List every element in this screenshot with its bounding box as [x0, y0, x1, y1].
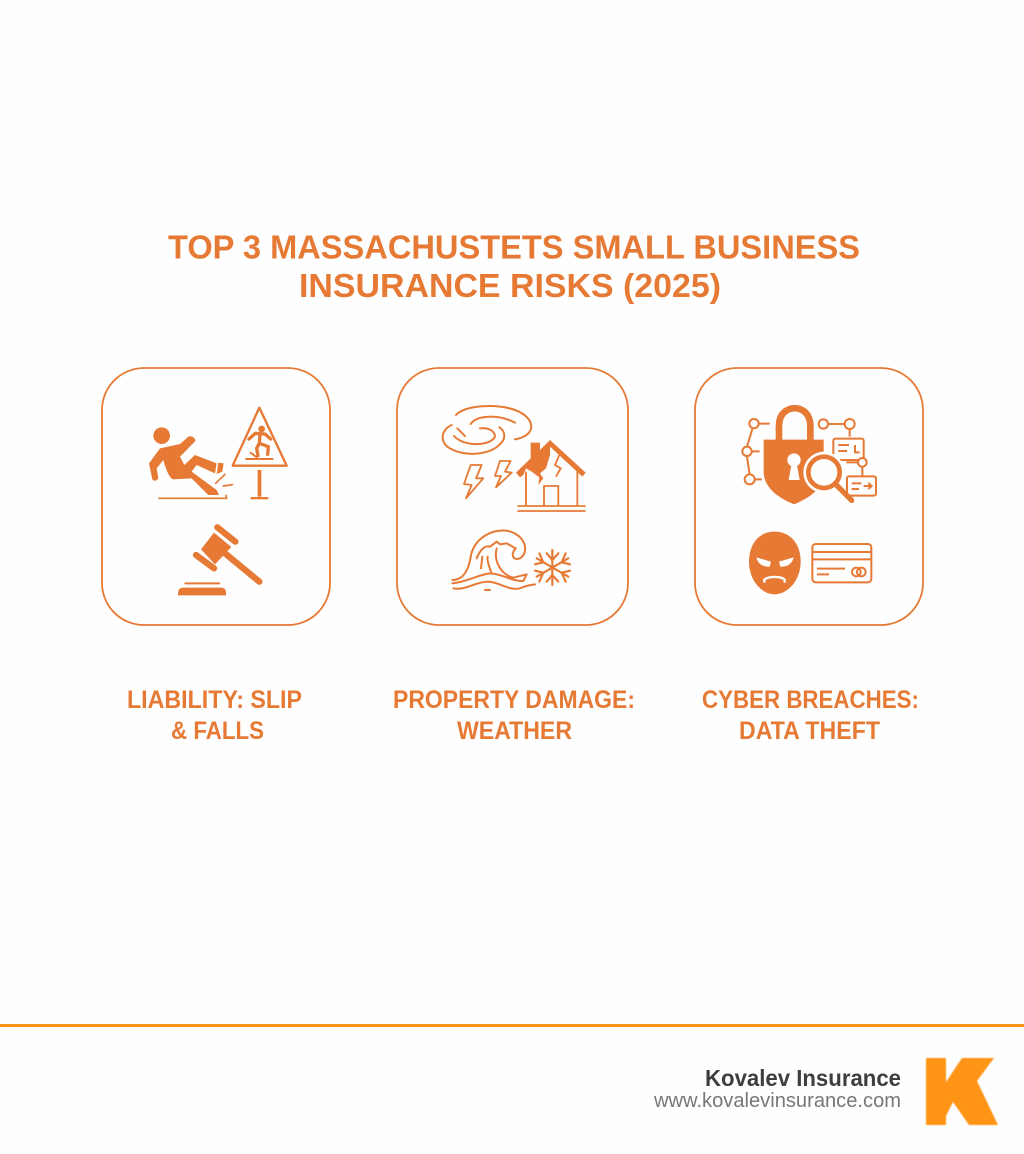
icon: padlock shield	[764, 408, 824, 504]
icon: cyclone	[443, 406, 531, 454]
label: cyber breaches	[702, 686, 919, 745]
footer rule	[0, 1024, 1024, 1027]
label: liability: & FALLS	[171, 717, 264, 745]
icon: snowflake	[535, 550, 570, 585]
label: cyber breaches: CYBER BREACHES:	[702, 686, 919, 714]
label: property damage: WEATHER	[457, 717, 572, 745]
icon: tidal wave	[452, 531, 535, 590]
label: liability: LIABILITY: SLIP	[127, 686, 302, 714]
label: property damage: PROPERTY DAMAGE:	[393, 686, 635, 714]
icon: network nodes	[742, 419, 876, 496]
panel: property damage	[397, 368, 628, 625]
icon: gavel	[178, 527, 259, 595]
footer website: www.kovalevinsurance.com	[653, 1090, 901, 1112]
title: TOP 3 MASSACHUSTETS SMALL BUSINESS	[168, 228, 860, 266]
footer brand name: Kovalev Insurance	[705, 1065, 901, 1091]
icon: magnifying glass	[803, 452, 852, 500]
title: INSURANCE RISKS (2025)	[299, 267, 721, 304]
icon: damaged house	[516, 440, 586, 511]
title	[168, 228, 860, 304]
icon: person slipping	[149, 427, 232, 498]
icon: wet floor sign	[233, 408, 287, 499]
label: property damage	[393, 686, 635, 745]
label: liability	[127, 686, 302, 745]
panel: liability	[102, 368, 330, 625]
label: cyber breaches: DATA THEFT	[739, 717, 880, 745]
icon: hacker mask	[749, 532, 801, 594]
logo: K	[926, 1058, 998, 1125]
icon: credit card	[812, 544, 871, 582]
icon: lightning bolts	[464, 461, 512, 498]
panel: cyber breaches	[695, 368, 923, 625]
